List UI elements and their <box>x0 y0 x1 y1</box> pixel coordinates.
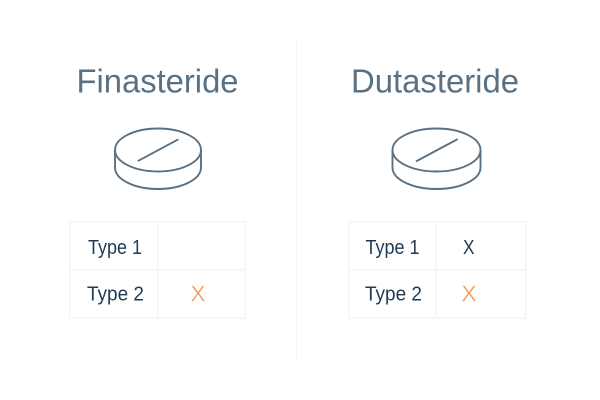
label: Type 2: Type 2 <box>365 282 422 306</box>
table: finasteride enzyme types <box>70 222 245 318</box>
mark: type 1 dark X: X <box>463 236 475 259</box>
label: Type 1: Type 1 <box>88 236 142 259</box>
mark: type 2 orange X: X <box>190 280 206 306</box>
icon: pill <box>115 128 201 189</box>
icon: pill <box>392 128 480 189</box>
label: Type 2: Type 2 <box>87 282 144 306</box>
panel: finasteride <box>70 63 245 318</box>
table: dutasteride enzyme types <box>348 222 526 318</box>
heading: Dutasteride: Dutasteride <box>351 63 519 100</box>
heading: Finasteride: Finasteride <box>76 63 238 100</box>
panel: dutasteride <box>348 63 526 318</box>
mark: type 2 orange X: X <box>461 280 477 306</box>
label: Type 1: Type 1 <box>366 236 420 259</box>
